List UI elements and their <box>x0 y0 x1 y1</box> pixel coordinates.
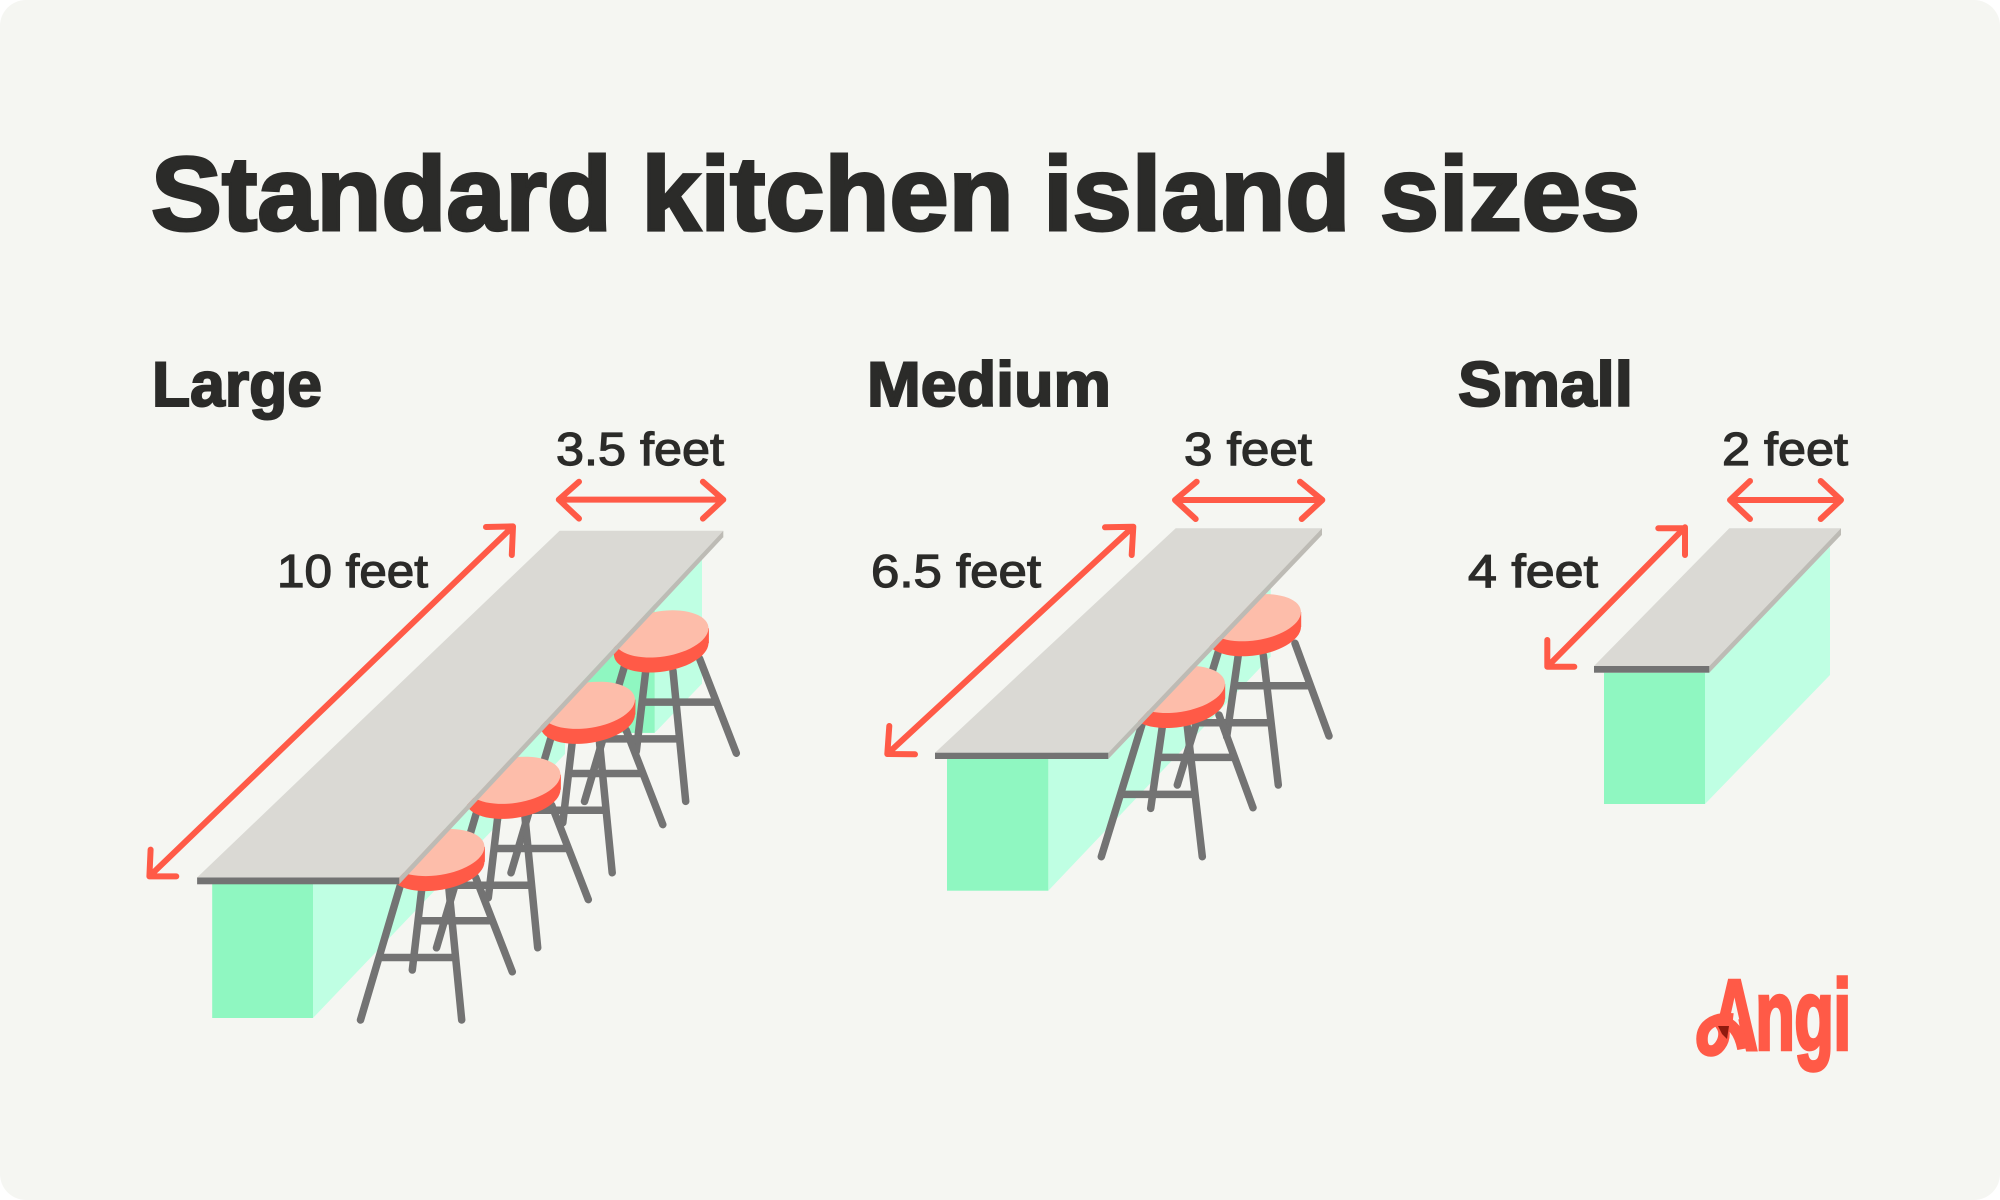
logo: Angi: Angi <box>1711 959 1851 1071</box>
label: 4 feet: 4 feet <box>1468 545 1598 597</box>
arrow: length 6.5 feet <box>887 527 1133 754</box>
countertop: small <box>1594 528 1841 673</box>
title: Standard kitchen island sizes <box>151 136 1640 253</box>
stool 2 <box>436 750 588 948</box>
panel: small island <box>1458 350 1848 804</box>
stool 3 <box>511 675 663 873</box>
label: 2 feet: 2 feet <box>1722 423 1848 475</box>
panel: medium island <box>867 350 1329 891</box>
arrow: width 3.5 feet <box>559 482 723 519</box>
label: 3.5 feet: 3.5 feet <box>556 423 724 475</box>
panel: large island <box>149 350 736 1020</box>
arrow: length 4 feet <box>1547 527 1685 667</box>
stool 1 <box>360 823 512 1020</box>
heading: large: Large <box>152 350 322 420</box>
countertop: large <box>197 531 723 884</box>
arrow: width 3 feet <box>1175 482 1322 519</box>
island base: medium <box>947 540 1271 891</box>
stool 4 <box>584 604 736 801</box>
island base: small <box>1604 547 1830 804</box>
heading: small: Small <box>1458 350 1633 420</box>
heading: medium: Medium <box>867 350 1111 420</box>
stool front <box>1101 660 1253 857</box>
label: 3 feet: 3 feet <box>1184 423 1312 475</box>
countertop: medium <box>935 528 1322 759</box>
arrow: width 2 feet <box>1730 481 1841 519</box>
label: 6.5 feet: 6.5 feet <box>871 545 1041 597</box>
arrow: length 10 feet <box>149 526 513 876</box>
label: 10 feet: 10 feet <box>277 545 428 597</box>
stool back <box>1177 588 1329 785</box>
island base: large <box>212 540 702 1018</box>
